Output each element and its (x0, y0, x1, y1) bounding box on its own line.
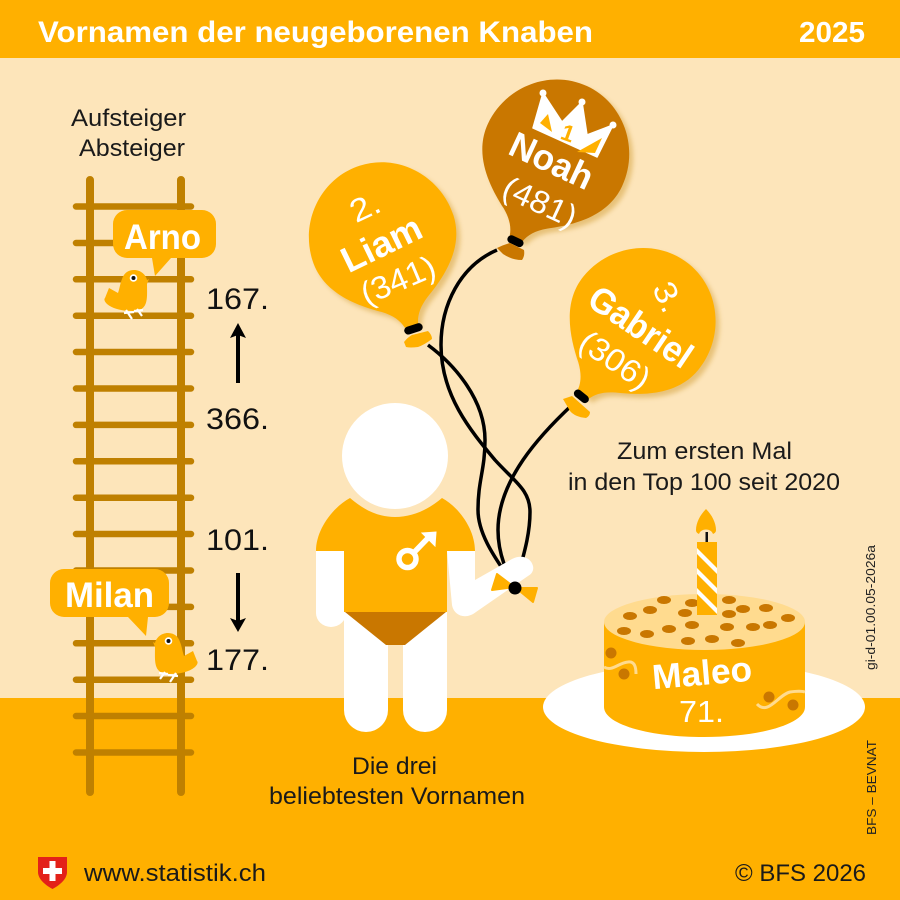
caption: balloons (269, 753, 525, 810)
icon: male symbol (399, 532, 436, 568)
ground band (0, 698, 900, 900)
balloon: Liam: Liam (334, 207, 429, 281)
caption: balloons: Die drei (352, 753, 437, 780)
head (342, 403, 448, 509)
title bar (0, 0, 900, 58)
cake top (604, 594, 805, 650)
balloon: Liam: (341) (355, 248, 441, 312)
figure: child (316, 403, 533, 732)
source code label: gi-d-01.00.05-2026a (864, 545, 878, 670)
sprinkles (617, 596, 795, 647)
balloon: Gabriel: 3. (645, 276, 691, 318)
rank: Milan 177: 177. (206, 644, 269, 677)
cake body (604, 622, 805, 737)
decoration (604, 648, 805, 710)
heading: Aufsteiger Absteiger (71, 105, 186, 162)
rank: Arno 366: 366. (206, 403, 269, 436)
cake (543, 509, 865, 752)
title: Vornamen der neugeborenen Knaben (38, 16, 593, 49)
balloon: Gabriel (526, 217, 750, 445)
balloon: Noah: Noah (503, 123, 600, 198)
rank: Milan 101: 101. (206, 524, 269, 557)
icon: bow (492, 574, 537, 602)
balloon: Gabriel: Gabriel (581, 277, 701, 376)
icon: crown: 1 (558, 119, 579, 147)
icon: Swiss shield (38, 857, 67, 889)
shirt (316, 498, 475, 612)
heading: Aufsteiger Absteiger: Absteiger (79, 135, 185, 162)
arms and legs (316, 551, 533, 732)
balloon: Noah (449, 55, 658, 274)
caption: balloons: beliebtesten Vornamen (269, 783, 525, 810)
footer url: www.statistik.ch (83, 860, 266, 887)
cake name: Maleo (651, 650, 754, 697)
icon: bird Milan (153, 633, 198, 682)
briefs (345, 612, 446, 645)
cake rank: 71. (679, 694, 724, 729)
icon: bird Arno (104, 270, 149, 319)
balloon: Noah: (481) (497, 169, 583, 235)
year: 2025 (799, 17, 865, 49)
caption: cake (568, 438, 840, 496)
heading: Aufsteiger Absteiger: Aufsteiger (71, 105, 186, 132)
source label: BFS – BEVNAT (865, 740, 879, 835)
plate (543, 662, 865, 752)
arrow down (230, 573, 246, 632)
balloon: Gabriel: (306) (573, 323, 657, 397)
strings (428, 250, 572, 588)
rank: Arno 167: 167. (206, 283, 269, 316)
caption: cake: Zum ersten Mal (617, 438, 792, 465)
callout: Milan: Milan (65, 576, 154, 615)
callout: Arno: Arno (124, 218, 201, 257)
arrow up (230, 323, 246, 383)
balloon: Liam: 2. (344, 184, 386, 230)
callout: Arno (113, 210, 216, 276)
candle (696, 509, 717, 615)
ladder (76, 180, 191, 792)
icon: crown (533, 90, 616, 157)
caption: cake: in den Top 100 seit 2020 (568, 469, 840, 496)
balloon: Liam (289, 143, 486, 352)
callout: Milan (50, 569, 169, 636)
footer copyright: © BFS 2026 (735, 860, 866, 887)
